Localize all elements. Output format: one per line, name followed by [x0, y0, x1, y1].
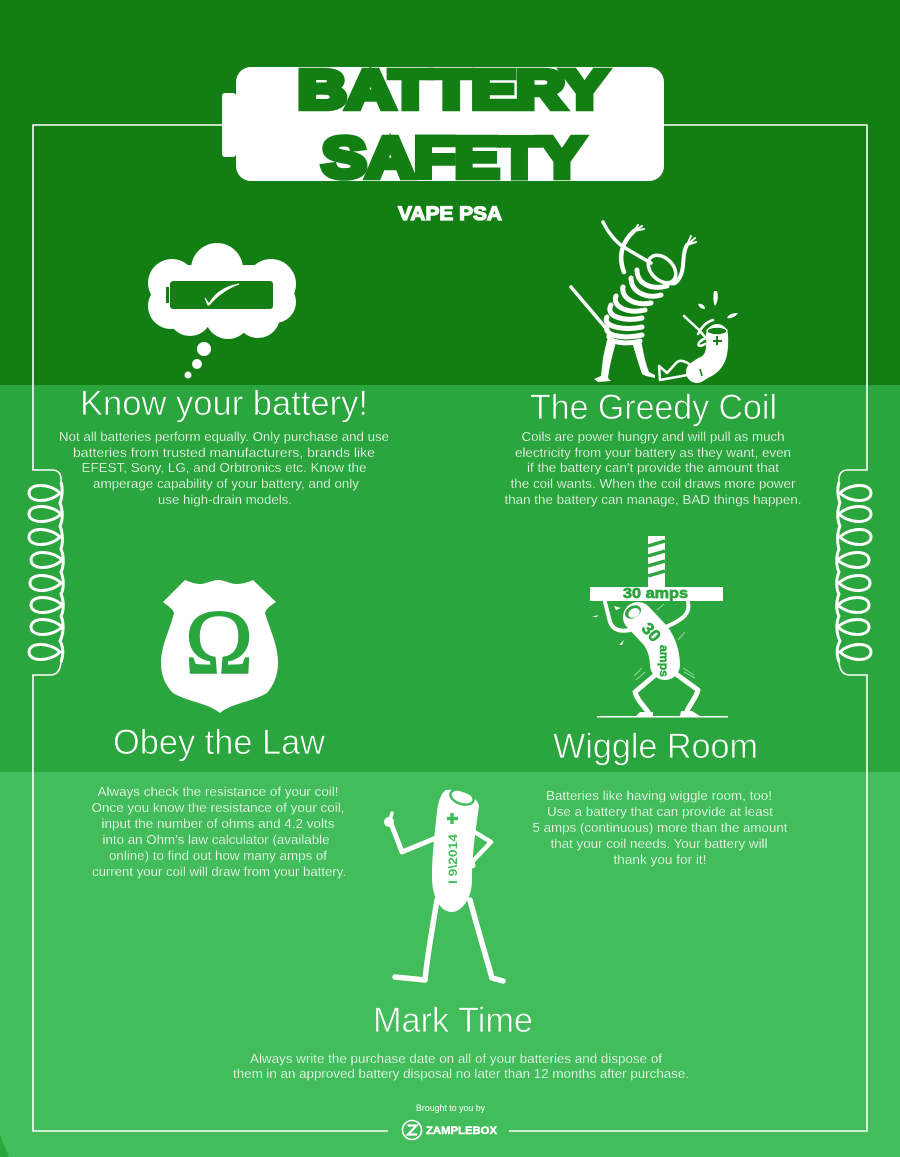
text block: know your battery: Not all batteries perform equally. Only purchase and use	[59, 429, 389, 444]
text block: obey the law: current your coil will draw from your battery.	[92, 864, 346, 879]
text block: wiggle room: 5 amps (continuous) more than the amount	[532, 820, 788, 835]
omega: Ω	[185, 591, 253, 693]
screw	[648, 536, 665, 588]
text block: wiggle room: Use a battery that can provide at least	[547, 804, 773, 819]
text block: the greedy coil: if the battery can't provide the amount that	[527, 460, 779, 475]
text block: obey the law: into an Ohm's law calculator (available	[102, 832, 330, 847]
heading: mark time: Mark Time	[373, 1001, 533, 1040]
subtitle: VAPE PSA	[398, 204, 502, 225]
burnt battery	[659, 291, 738, 380]
text block: wiggle room: Batteries like having wiggle room, too!	[546, 788, 772, 803]
title text: SAFETY	[322, 126, 584, 190]
battery label: 30	[638, 619, 664, 646]
text block: the greedy coil: Coils are power hungry and will pull as much	[522, 429, 784, 444]
text block: mark time: Always write the purchase date on all of your batteries and dispose of	[250, 1051, 662, 1066]
text block: mark time	[233, 1051, 689, 1081]
title text: BATTERY	[298, 60, 607, 120]
text block: know your battery	[59, 429, 389, 507]
icon: ohm police badge	[161, 580, 278, 713]
load label: 30 amps	[623, 586, 688, 602]
icon: battery lifting 30 amp load	[590, 536, 728, 718]
title battery	[222, 60, 664, 190]
text block: obey the law: input the number of ohms and 4.2 volts	[102, 816, 335, 831]
heading: obey the law: Obey the Law	[113, 723, 326, 762]
credit line: Brought to you by	[416, 1103, 485, 1113]
text block: the greedy coil: than the battery can manage, BAD things happen.	[504, 492, 802, 507]
text block: obey the law: Always check the resistance of your coil!	[98, 784, 338, 799]
text block: obey the law: online) to find out how many amps of	[109, 848, 327, 863]
heading: wiggle room: Wiggle Room	[553, 727, 758, 766]
title text	[298, 60, 607, 190]
text block: know your battery: use high-drain models.	[158, 492, 292, 507]
text block: obey the law: Once you know the resistance of your coil,	[92, 800, 344, 815]
icon: battery with date	[384, 787, 503, 981]
battery label	[638, 619, 671, 677]
text block: know your battery: amperage capability of your battery, and only	[93, 476, 360, 491]
date label: I 9\2014	[446, 834, 460, 884]
icon: greedy coil and battery	[571, 222, 738, 382]
heading: know your battery: Know your battery!	[80, 384, 368, 423]
right coil	[837, 482, 871, 662]
left coil	[29, 482, 63, 662]
text block: the greedy coil	[504, 429, 802, 507]
text block: obey the law	[92, 784, 346, 879]
icon: thought cloud with battery	[148, 243, 296, 378]
text block: mark time: them in an approved battery disposal no later than 12 months after purchase.	[233, 1066, 689, 1081]
coil character	[571, 222, 696, 382]
text block: the greedy coil: electricity from your battery as they want, even	[515, 445, 791, 460]
battery label: amps	[657, 645, 671, 677]
load bar	[590, 587, 723, 601]
text block: wiggle room: thank you for it!	[614, 852, 706, 867]
heading: the greedy coil: The Greedy Coil	[530, 388, 777, 427]
logo: zamplebox: ZAMPLEBOX	[426, 1125, 498, 1137]
text block: know your battery: EFEST, Sony, LG, and Orbtronics etc. Know the	[82, 460, 366, 475]
logo: zamplebox	[402, 1120, 498, 1140]
text block: wiggle room: that your coil needs. Your battery will	[550, 836, 768, 851]
text block: the greedy coil: the coil wants. When the coil draws more power	[510, 476, 796, 491]
text block: wiggle room	[532, 788, 788, 867]
text block: know your battery: batteries from trusted manufacturers, brands like	[73, 445, 375, 460]
